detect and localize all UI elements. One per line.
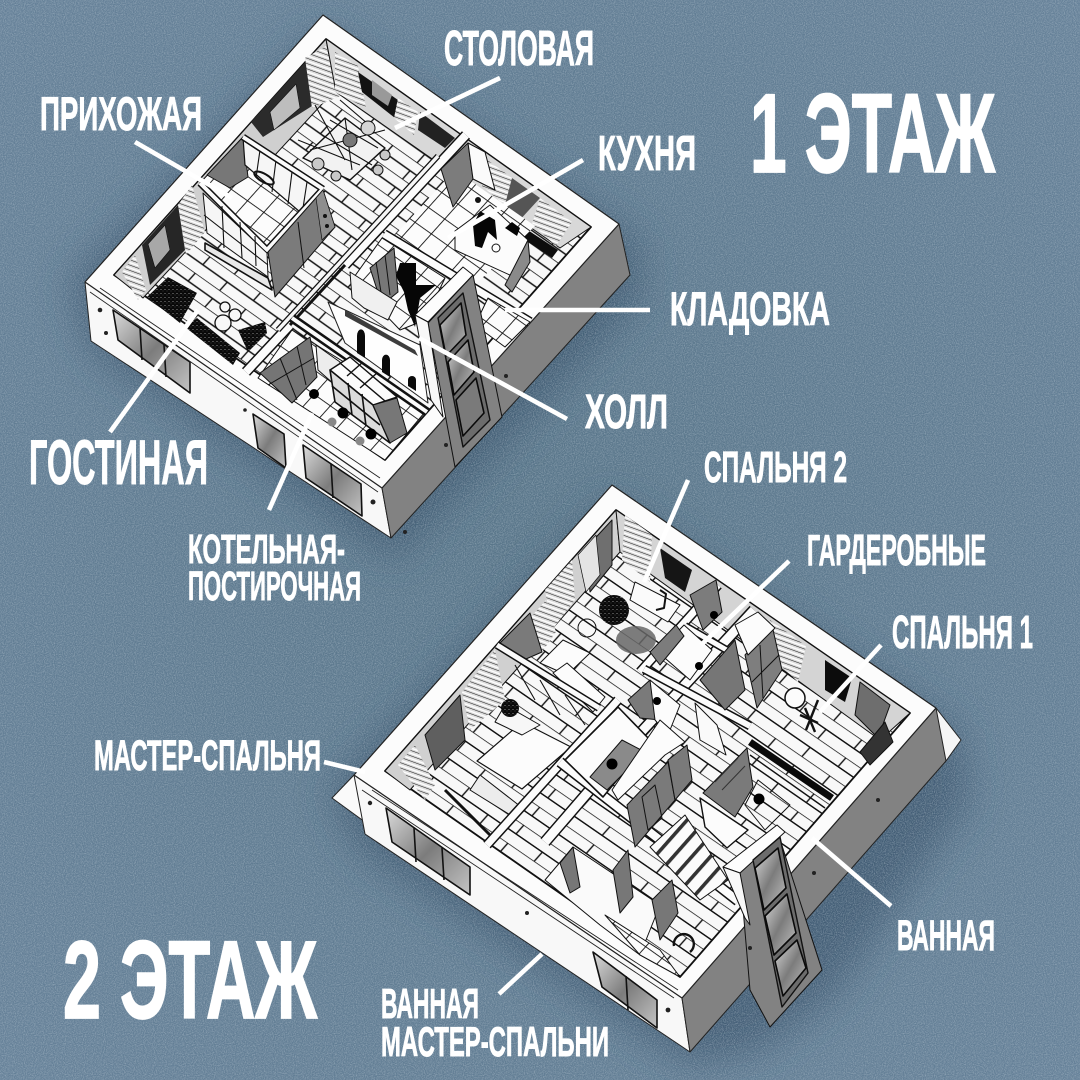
first floor ground bbox=[114, 39, 591, 460]
second floor slab edge right bbox=[930, 708, 961, 761]
second floor ground bbox=[385, 510, 910, 977]
house: first floor bbox=[85, 15, 630, 538]
master bed bbox=[445, 699, 571, 835]
ring inner outlines bbox=[90, 288, 380, 492]
label: прихожая: ПРИХОЖАЯ bbox=[40, 87, 202, 140]
second floor chimney column bbox=[723, 825, 822, 1027]
first floor chimney column bbox=[415, 267, 502, 467]
long corridor walls bbox=[246, 135, 466, 372]
storage room with dark silhouette bbox=[352, 238, 445, 330]
boiler room shelves bbox=[309, 357, 407, 446]
armchair bbox=[238, 322, 267, 352]
back band right bbox=[616, 510, 910, 740]
label: ванная мастер-спальни bbox=[381, 980, 609, 1065]
second floor anchor dots bbox=[368, 798, 880, 1012]
living room sofa bbox=[147, 277, 197, 323]
grey door panels bbox=[612, 703, 726, 847]
coffee tables bbox=[215, 302, 241, 331]
boiler room bbox=[258, 330, 425, 460]
pantry floor bbox=[475, 298, 530, 347]
leader lines bbox=[110, 78, 891, 994]
hall white partition bbox=[328, 302, 428, 403]
second floor outer right wall bbox=[682, 708, 946, 1052]
label: мастер-спальня: МАСТЕР-СПАЛЬНЯ bbox=[94, 732, 321, 780]
wardrobe rooms bbox=[628, 580, 722, 735]
second floor slab edge bbox=[332, 775, 370, 822]
bedroom 1 wardrobe bbox=[700, 612, 782, 710]
label: котельная-постирочная: ПОСТИРОЧНАЯ bbox=[188, 563, 361, 609]
pantry walls bbox=[384, 234, 530, 322]
hall rear room bbox=[350, 272, 397, 320]
second bathroom room bbox=[700, 748, 790, 848]
master bathroom bbox=[545, 847, 694, 977]
central closet bbox=[565, 707, 650, 797]
label: столовая: СТОЛОВАЯ bbox=[444, 22, 594, 76]
first floor windows bbox=[113, 310, 362, 516]
second floor windows bbox=[386, 808, 657, 1028]
house: second floor bbox=[332, 485, 961, 1052]
boiler room wall strip bbox=[292, 318, 427, 412]
staircase bbox=[650, 815, 728, 900]
kitchen bbox=[395, 143, 535, 292]
bedroom 2 furniture bbox=[540, 582, 680, 712]
ring inner outlines second floor bbox=[362, 790, 678, 998]
bedroom 1 table and plant bbox=[785, 688, 893, 765]
label: ванная мастер-спальни: МАСТЕР-СПАЛЬНИ bbox=[381, 1018, 609, 1065]
label: котельная-постирочная: КОТЕЛЬНАЯ- bbox=[188, 526, 345, 572]
back wall band left with curtains bbox=[114, 39, 340, 300]
label: спальня 2: СПАЛЬНЯ 2 bbox=[704, 443, 847, 492]
back wall band right with curtains bbox=[326, 39, 591, 258]
master headboard wall bbox=[497, 645, 599, 725]
title: 2 этаж: 2 ЭТАЖ bbox=[63, 919, 317, 1042]
label: ванная мастер-спальни: ВАННАЯ bbox=[381, 980, 479, 1027]
first floor roof ring bbox=[85, 15, 619, 488]
living room second sofa bbox=[185, 318, 240, 365]
label: холл: ХОЛЛ bbox=[585, 386, 668, 439]
hallway grey door face bbox=[268, 190, 335, 297]
label: котельная-постирочная bbox=[188, 526, 361, 609]
wall anchor dots bbox=[98, 308, 508, 534]
label: ванная: ВАННАЯ bbox=[897, 912, 995, 960]
label: кладовка: КЛАДОВКА bbox=[670, 282, 830, 335]
label: кухня: КУХНЯ bbox=[598, 127, 696, 181]
interior partition walls bbox=[487, 585, 832, 901]
second floor roof ring bbox=[354, 485, 936, 998]
dining table bbox=[298, 100, 390, 181]
label: гостиная: ГОСТИНАЯ bbox=[29, 428, 208, 498]
hallway box room bbox=[200, 137, 335, 297]
first floor outer right wall bbox=[382, 224, 630, 538]
second floor outer left wall bbox=[354, 775, 690, 1052]
first floor outer left wall bbox=[85, 282, 391, 538]
back band left bbox=[385, 510, 620, 800]
